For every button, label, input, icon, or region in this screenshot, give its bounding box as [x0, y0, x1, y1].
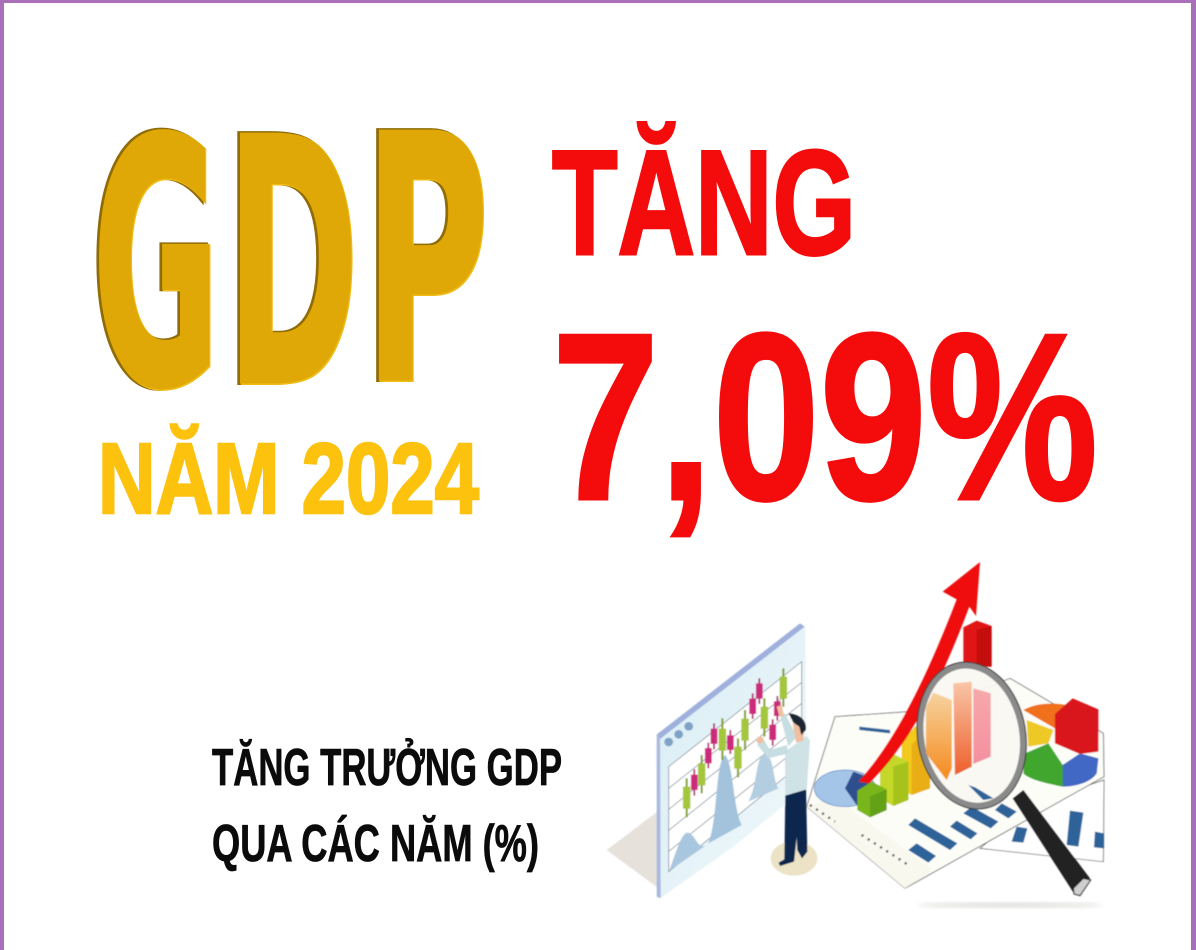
- heading: GDP: P: [362, 64, 487, 460]
- heading: GDP: D: [227, 68, 360, 464]
- text block: chart title: [212, 738, 562, 873]
- heading: GDP: G: [93, 69, 221, 465]
- heading: GDP: D: [224, 67, 357, 463]
- heading: GDP: P: [365, 65, 490, 461]
- icon: ground shadow: [917, 902, 1103, 908]
- subheading: NĂM 2024: NĂM 2024: [98, 423, 479, 535]
- text block: chart title: QUA CÁC NĂM (%): [212, 815, 539, 873]
- icon: magnifying glass: [906, 653, 1091, 896]
- bar chart: 3D bars: [857, 621, 992, 817]
- icon: person: [756, 705, 817, 876]
- icon: chart screen: [657, 623, 806, 898]
- heading: GDP: P: [364, 64, 489, 460]
- heading: TĂNG: TĂNG: [552, 119, 856, 286]
- icon: pie chart: [1023, 698, 1098, 787]
- text block: chart title: TĂNG TRƯỞNG GDP: [212, 738, 562, 797]
- icon: red growth arrow: [858, 562, 980, 783]
- heading: GDP: G: [92, 68, 220, 464]
- chart: candlesticks: [683, 668, 787, 817]
- heading: GDP: G: [90, 68, 218, 464]
- heading: GDP: [90, 64, 490, 465]
- illustration: data analysis: [607, 562, 1104, 908]
- icon: report papers: [807, 678, 1104, 888]
- icon: floor shadow: [607, 812, 657, 887]
- heading: GDP: D: [226, 67, 359, 463]
